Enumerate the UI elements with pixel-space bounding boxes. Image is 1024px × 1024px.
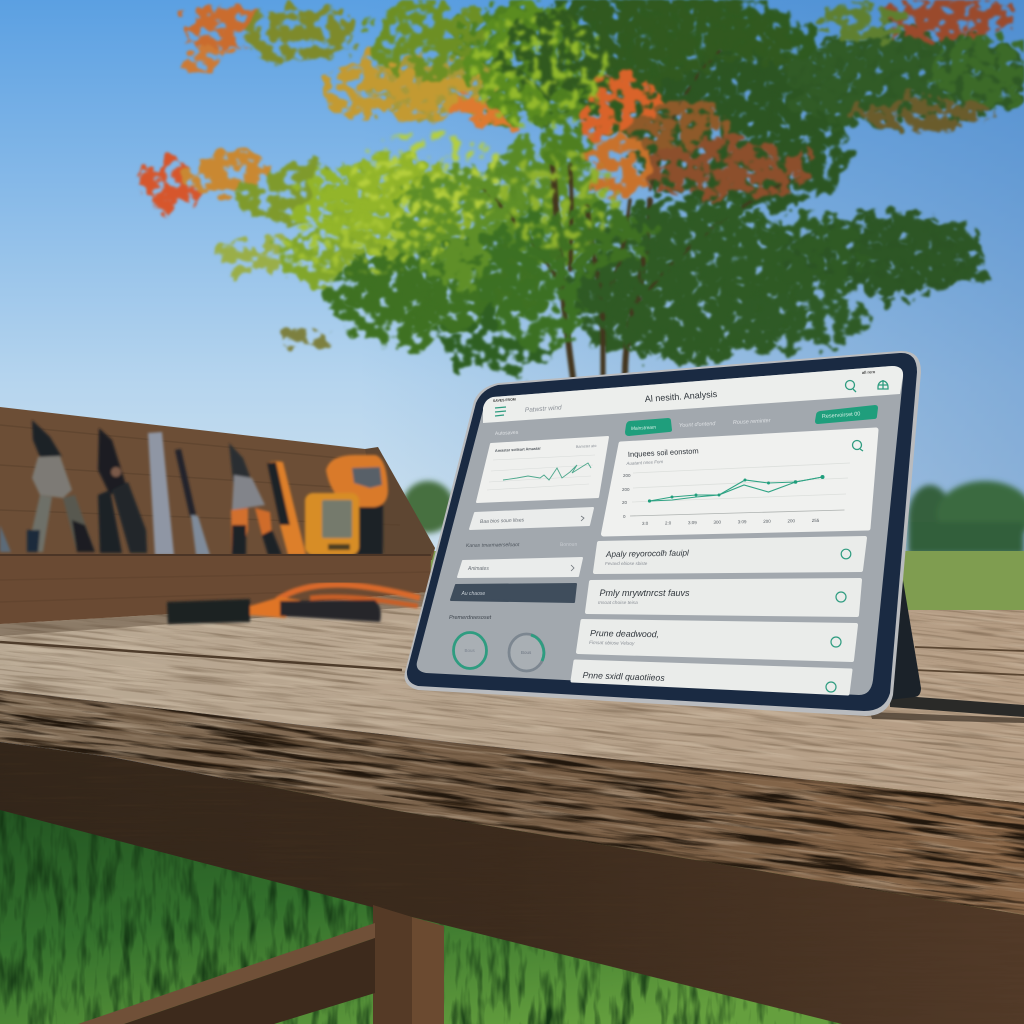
app header bar: all rero xyxy=(862,369,876,375)
lopper handle xyxy=(280,600,381,622)
small chart card xyxy=(477,437,608,502)
table beam xyxy=(0,740,1024,1024)
app header bar: Al nesith. Analysis xyxy=(644,389,718,404)
task row 3: Fimsat obiose Velsoy xyxy=(589,640,635,647)
action button xyxy=(815,405,878,424)
task row 3 xyxy=(578,621,856,660)
foliage: lower left xyxy=(285,165,600,373)
orange cord xyxy=(277,585,420,600)
small chart card: Bamster ato xyxy=(576,444,597,449)
task row 2: Pmly mrywtnrcst fauvs xyxy=(600,588,690,598)
dark list row: Au chaose xyxy=(460,591,485,597)
list row 1 xyxy=(470,508,593,529)
tree foliage dense canopy xyxy=(320,0,1024,360)
donut gauge 1: Bous xyxy=(464,648,476,653)
task row 2: Insoat choise teisa xyxy=(598,600,638,606)
main chart card: 20 xyxy=(622,500,628,505)
tool: orange handled tool xyxy=(267,461,306,555)
foliage: centre dark xyxy=(500,0,870,360)
tablet stand xyxy=(888,580,921,700)
tool: small saw xyxy=(175,449,210,555)
list row 2: Animates xyxy=(467,566,489,572)
tools on the board xyxy=(0,420,388,555)
list row 1: Baa bios soun lilses xyxy=(480,517,525,525)
stand shadow band xyxy=(890,695,1024,717)
tab inactive 2: Rouse reminter xyxy=(733,418,772,426)
main chart card: Inquees soil eonstom xyxy=(628,446,699,459)
menu icon xyxy=(495,407,506,416)
donut gauge 1 xyxy=(454,632,486,668)
main chart card: Auatant nnes Fom xyxy=(625,459,664,466)
table top surface xyxy=(0,592,1024,803)
shadow under tablet xyxy=(870,712,1024,723)
foliage: left wing xyxy=(143,149,470,285)
task row 2 xyxy=(587,580,860,615)
dark list row xyxy=(451,584,576,602)
foliage: red-orange accent xyxy=(584,70,812,197)
tablet device xyxy=(405,351,921,716)
tab active: Mainstream xyxy=(631,425,656,432)
table diagonal brace xyxy=(78,923,375,1024)
small chart card: Amastar soilsart Amastar xyxy=(495,447,541,453)
near grass below table xyxy=(0,780,1024,1024)
action button: Reservoirset 00 xyxy=(822,411,861,420)
foliage: right xyxy=(770,0,1024,297)
app header bar: Patwstr wind xyxy=(525,404,562,414)
main chart card xyxy=(604,430,876,534)
main chart card: 3:0 2:0 3:09 300 3:09 200 200 255 xyxy=(642,518,820,526)
donut gauge 2 xyxy=(509,634,544,671)
dark bezel xyxy=(407,353,917,711)
tool: multimeter xyxy=(305,493,359,555)
lopper orange joint xyxy=(250,597,300,618)
main chart card: 0 xyxy=(623,514,626,519)
tree foliage bright specks xyxy=(280,10,620,275)
tool box: back board xyxy=(0,407,435,560)
table leg post xyxy=(373,905,444,1024)
sky background xyxy=(0,0,1024,620)
tab inactive 1: Yount d'ontend xyxy=(679,421,717,429)
tools lying on the table xyxy=(167,585,420,624)
tab active xyxy=(625,418,672,436)
search icon xyxy=(852,440,863,451)
foliage: top left xyxy=(185,0,590,126)
sidebar section aside: Bonoun xyxy=(560,542,577,548)
list row 2 xyxy=(458,558,582,577)
screen xyxy=(417,366,903,695)
tool: saw blade xyxy=(148,432,174,555)
table front edge xyxy=(0,690,1024,915)
task row 1: Apaly reyorocolh fauipl xyxy=(605,549,689,559)
tool: pruner 2 xyxy=(98,428,147,553)
tool: pruner 3 xyxy=(229,443,282,555)
task row 4 xyxy=(572,661,851,694)
app header bar xyxy=(483,366,903,423)
app header bar: SAVES FROM xyxy=(493,397,516,403)
box icon xyxy=(878,380,888,389)
task row 4: Pnne sxidl quaotiieos xyxy=(582,670,665,683)
search icon xyxy=(846,380,856,392)
distant tree line xyxy=(402,481,1024,554)
grass field in distance xyxy=(300,551,1024,621)
lopper black head xyxy=(167,599,250,624)
main chart card: 200 xyxy=(622,487,630,492)
tool: small cutter at edge xyxy=(0,525,11,552)
rounds heading: Premerdreesoset xyxy=(449,615,492,621)
tree foliage leaves xyxy=(143,0,1024,373)
tool: pruner 1 xyxy=(27,420,95,552)
sidebar section heading: Kanas tmarmaersefoaot xyxy=(466,542,520,549)
sidebar heading: Autosaves xyxy=(495,430,519,437)
tree branches and trunk xyxy=(473,50,790,378)
task row 3: Prune deadwood, xyxy=(590,628,659,639)
donut gauge 2: Bous xyxy=(521,650,532,655)
main chart card: 200 xyxy=(623,473,631,478)
task row 1 xyxy=(595,538,865,572)
task row 1: Fevavd ebiose sbiste xyxy=(605,561,648,566)
silver rim xyxy=(405,351,921,716)
tool: orange gauge xyxy=(326,455,388,555)
tool box: front board xyxy=(0,555,431,625)
